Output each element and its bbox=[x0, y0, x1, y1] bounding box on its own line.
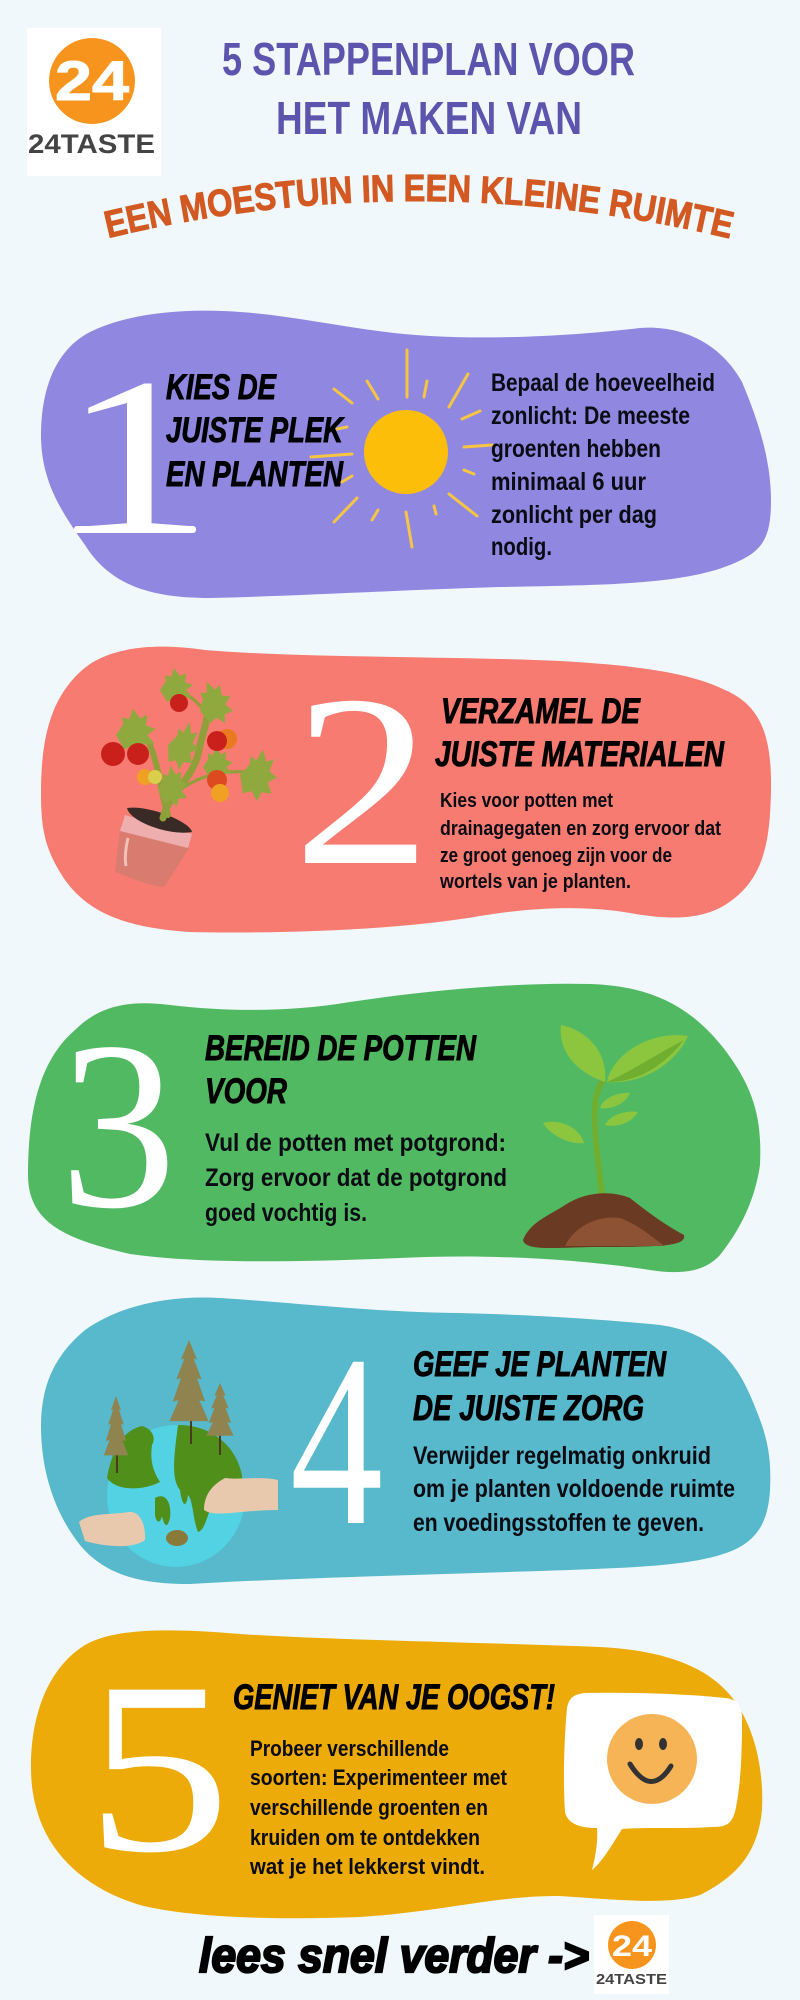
body text: soorten: Experimenteer met bbox=[250, 1765, 508, 1790]
logo: 24TASTE: 24TASTE bbox=[28, 129, 155, 159]
panel: step 2 bbox=[41, 645, 771, 932]
number 4: 4 bbox=[290, 1306, 383, 1577]
logo: 24TASTE: 24 bbox=[55, 49, 129, 112]
body text: Probeer verschillende bbox=[250, 1736, 449, 1761]
number 2: 2 bbox=[293, 645, 431, 916]
heading: EN PLANTEN bbox=[166, 455, 344, 494]
body text: en voedingsstoffen te geven. bbox=[413, 1509, 704, 1537]
heading: BEREID DE POTTEN bbox=[205, 1029, 477, 1068]
body text: wat je het lekkerst vindt. bbox=[249, 1854, 485, 1879]
illustration: globe with trees and hands bbox=[79, 1340, 278, 1567]
logo: small 24TASTE bbox=[594, 1915, 669, 1994]
body text: minimaal 6 uur bbox=[491, 468, 646, 496]
logo: small 24TASTE: 24TASTE bbox=[596, 1971, 667, 1988]
heading: GENIET VAN JE OOGST! bbox=[233, 1678, 555, 1717]
footer: read more link: lees snel verder -> bbox=[199, 1930, 589, 1983]
logo: small 24TASTE: 24 bbox=[612, 1930, 652, 1963]
heading bbox=[435, 692, 725, 774]
body text: Kies voor potten met bbox=[440, 790, 613, 812]
body text: verschillende groenten en bbox=[250, 1795, 488, 1820]
heading: VERZAMEL DE bbox=[441, 692, 641, 731]
body text: groenten hebben bbox=[491, 435, 661, 463]
heading bbox=[166, 368, 345, 494]
panel: step 3 bbox=[28, 984, 760, 1272]
title bbox=[222, 33, 635, 144]
heading: DE JUISTE ZORG bbox=[413, 1389, 644, 1428]
logo: 24TASTE bbox=[27, 28, 161, 176]
number 5: 5 bbox=[86, 1631, 231, 1903]
heading: JUISTE MATERIALEN bbox=[435, 735, 725, 774]
illustration: tomato plant in pot bbox=[101, 668, 283, 887]
body text: Zorg ervoor dat de potgrond bbox=[205, 1164, 507, 1192]
panel: step 4 bbox=[41, 1297, 770, 1584]
number 1: 1 bbox=[62, 332, 208, 581]
body text: kruiden om te ontdekken bbox=[250, 1825, 480, 1850]
body text: nodig. bbox=[491, 533, 552, 561]
title: 5 STAPPENPLAN VOOR bbox=[222, 33, 635, 85]
body text: ze groot genoeg zijn voor de bbox=[440, 845, 672, 867]
panel: step 1 bbox=[41, 311, 771, 598]
body text: om je planten voldoende ruimte bbox=[413, 1475, 735, 1503]
title: HET MAKEN VAN bbox=[276, 92, 582, 144]
body text bbox=[491, 369, 715, 561]
body text: goed vochtig is. bbox=[205, 1199, 367, 1227]
heading bbox=[205, 1029, 477, 1111]
heading: KIES DE bbox=[166, 368, 277, 407]
panel: step 5 bbox=[31, 1630, 762, 1918]
number 3: 3 bbox=[60, 993, 176, 1259]
body text: zonlicht: De meeste bbox=[491, 402, 690, 430]
heading: GEEF JE PLANTEN bbox=[413, 1345, 667, 1384]
heading: JUISTE PLEK bbox=[166, 411, 345, 450]
heading: VOOR bbox=[205, 1072, 288, 1111]
body text bbox=[205, 1129, 507, 1227]
body text: zonlicht per dag bbox=[491, 501, 657, 529]
body text bbox=[413, 1442, 735, 1537]
body text bbox=[439, 790, 721, 893]
icon: speech bubble with smiley bbox=[564, 1693, 742, 1870]
body text bbox=[249, 1736, 508, 1879]
body text: Verwijder regelmatig onkruid bbox=[413, 1442, 711, 1470]
body text: drainagegaten en zorg ervoor dat bbox=[440, 818, 721, 840]
heading bbox=[413, 1345, 667, 1428]
body text: Vul de potten met potgrond: bbox=[205, 1129, 506, 1157]
illustration: seedling in soil bbox=[523, 1025, 688, 1248]
body text: Bepaal de hoeveelheid bbox=[491, 369, 715, 397]
curved subtitle: EEN MOESTUIN IN EEN KLEINE RUIMTE bbox=[104, 174, 734, 239]
body text: wortels van je planten. bbox=[439, 871, 631, 893]
icon: sun bbox=[311, 350, 492, 547]
